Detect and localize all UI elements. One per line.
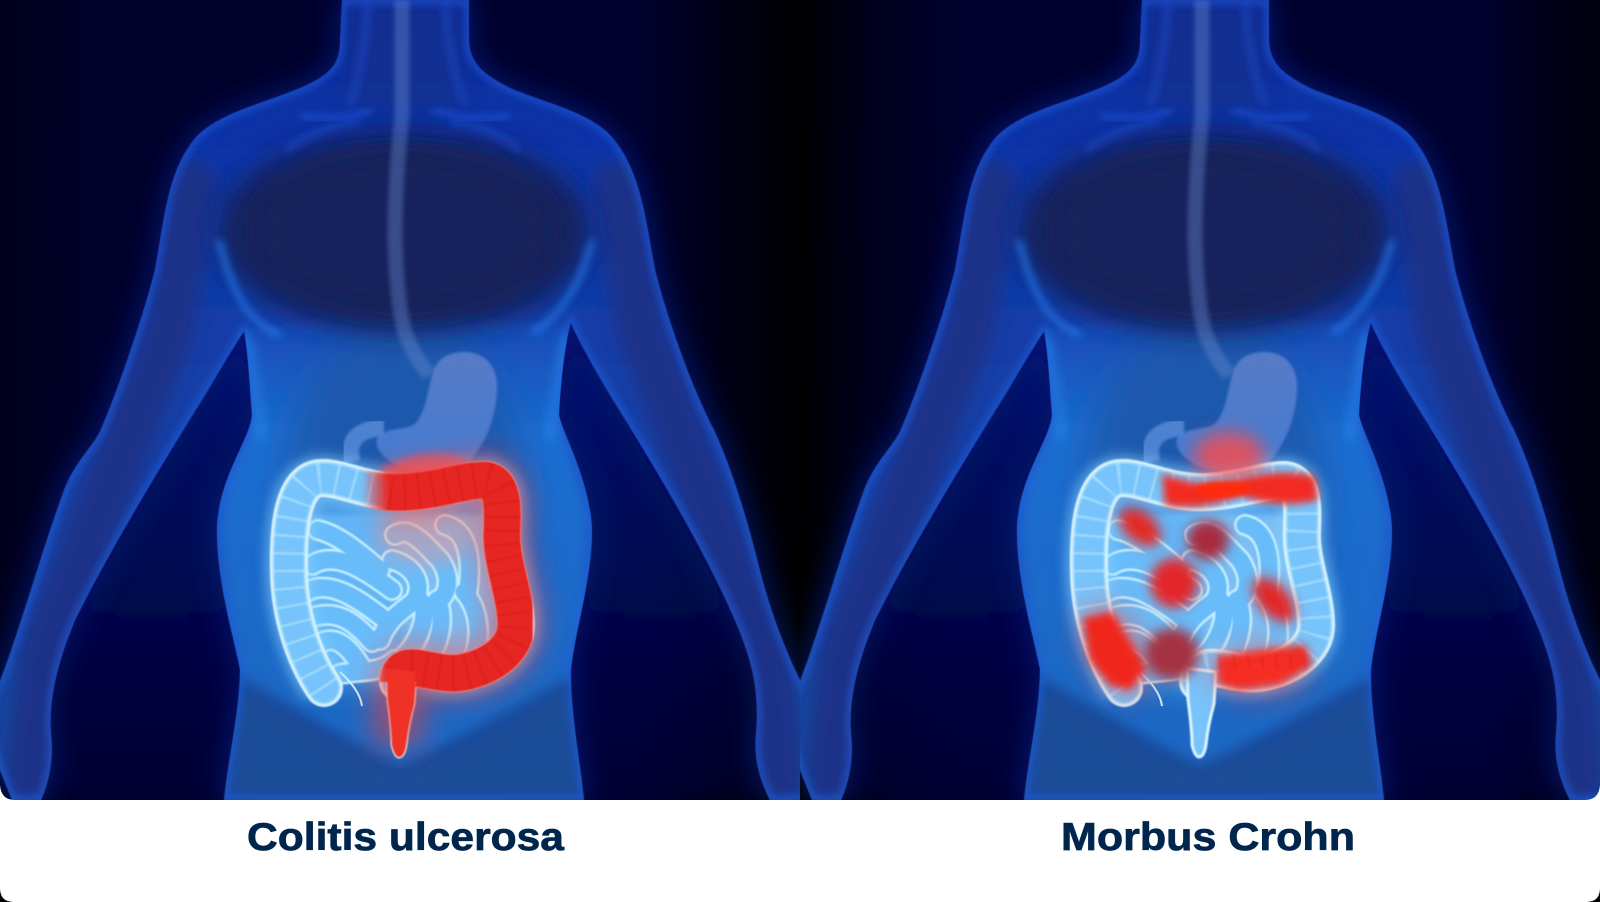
- inflamed patches: scattered red areas: [1068, 432, 1318, 707]
- panel: Colitis ulcerosa illustration: [0, 0, 820, 800]
- body with digestive tract: [780, 0, 1600, 800]
- heading: Colitis ulcerosa: Colitis ulcerosa: [247, 816, 564, 859]
- heading: Morbus Crohn: Morbus Crohn: [1061, 816, 1355, 859]
- body with digestive tract: [0, 0, 820, 800]
- caption band: [0, 785, 1600, 902]
- panel: Morbus Crohn illustration: [780, 0, 1600, 800]
- inflamed colon: red highlighted large bowel and rectum: [355, 453, 516, 757]
